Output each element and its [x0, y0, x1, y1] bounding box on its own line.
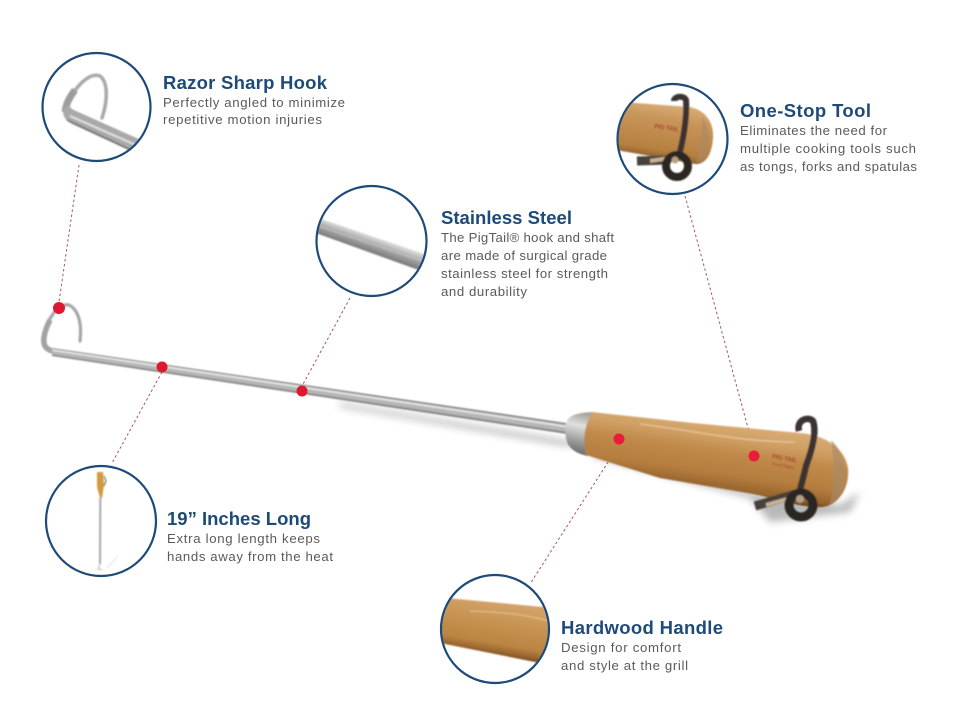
description — [167, 531, 333, 564]
description: Perfectly angled to minimize — [163, 95, 345, 110]
icon: handle close-up — [435, 575, 555, 683]
heading: Hardwood Handle — [561, 617, 723, 638]
heading: Razor Sharp Hook — [163, 72, 328, 93]
tool shadow — [340, 403, 860, 522]
description: as tongs, forks and spatulas — [740, 159, 917, 174]
callout: 19 inches long — [46, 466, 333, 576]
description: stainless steel for strength — [441, 266, 608, 281]
description: multiple cooking tools such — [740, 141, 916, 156]
icon: hook close-up — [42, 53, 150, 161]
icon: shaft close-up — [310, 186, 430, 296]
heading: Stainless Steel — [441, 207, 572, 228]
callout: hardwood handle — [435, 575, 723, 683]
description: and style at the grill — [561, 658, 688, 673]
description — [561, 640, 688, 673]
product: pigtail meat flipper tool — [44, 305, 860, 522]
description — [740, 123, 917, 174]
product: pigtail meat flipper tool: Food Flipper — [772, 461, 795, 470]
description: are made of surgical grade — [441, 248, 607, 263]
handle end grain — [830, 440, 845, 504]
icon: handle end with strap: PIG TAIL — [654, 124, 680, 133]
icon: handle end with strap — [610, 84, 728, 194]
callout: stainless steel — [310, 186, 614, 299]
wooden handle — [584, 412, 848, 507]
heading: One-Stop Tool — [740, 100, 871, 121]
dotted leader lines — [59, 165, 754, 584]
leather strap — [799, 419, 814, 490]
description: Eliminates the need for — [740, 123, 888, 138]
description: hands away from the heat — [167, 549, 333, 564]
metal ferrule — [565, 412, 593, 456]
red marker dots — [53, 302, 760, 462]
description: The PigTail® hook and shaft — [441, 230, 614, 245]
description — [441, 230, 614, 299]
heading: 19” Inches Long — [167, 508, 311, 529]
description — [163, 95, 345, 127]
logo mark: PIG TAIL — [772, 454, 798, 464]
callout: razor sharp hook — [42, 53, 345, 161]
description: Extra long length keeps — [167, 531, 320, 546]
callout: one-stop tool — [610, 84, 917, 194]
description: repetitive motion injuries — [163, 112, 322, 127]
icon: full tool vertical — [46, 466, 156, 576]
shaft — [52, 348, 567, 434]
description: and durability — [441, 284, 527, 299]
description: Design for comfort — [561, 640, 681, 655]
hook — [47, 305, 81, 341]
